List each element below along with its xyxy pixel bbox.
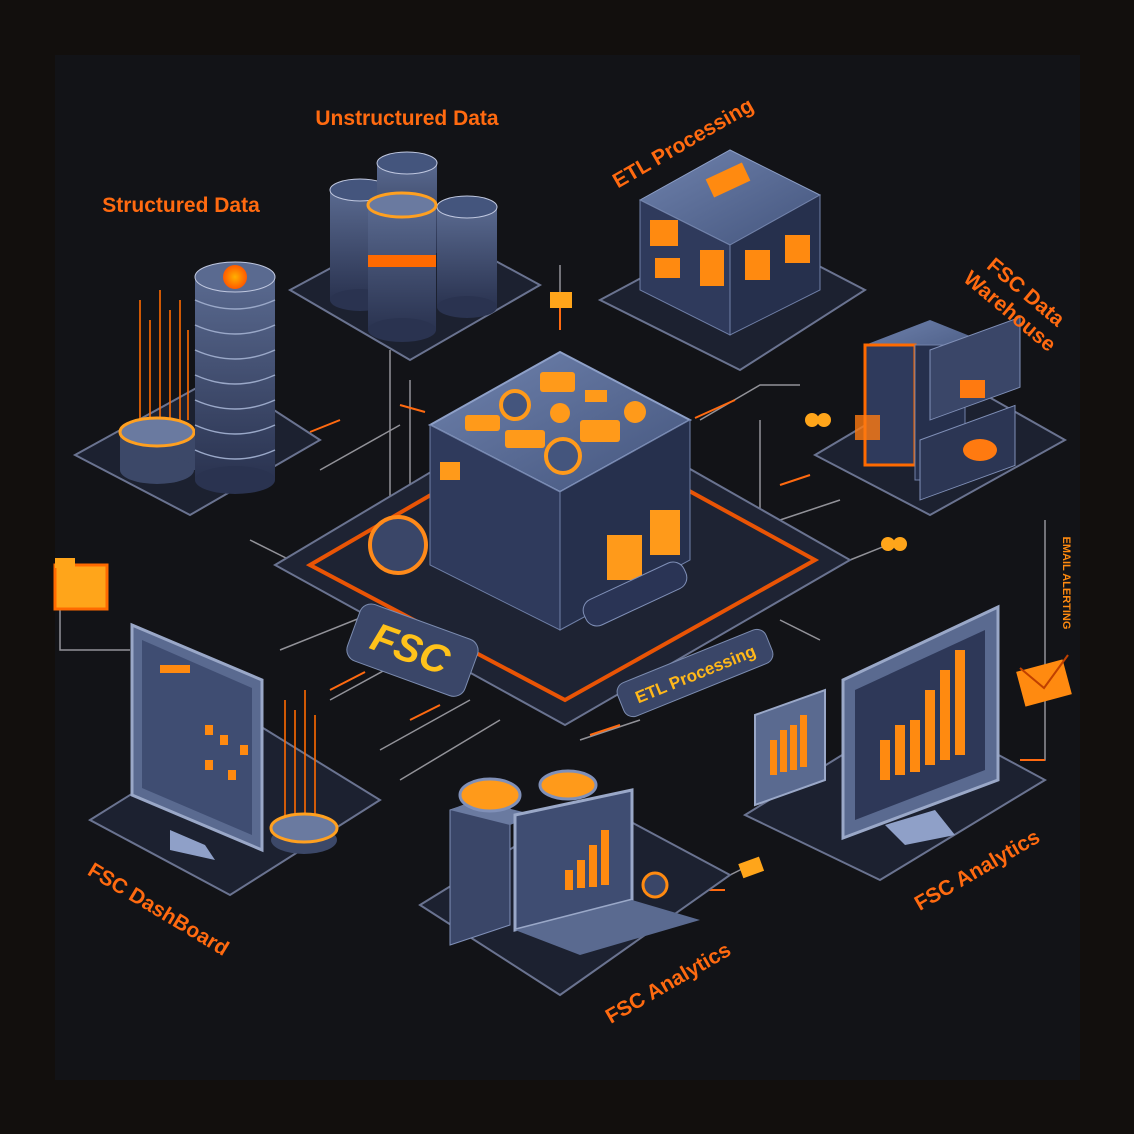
ETL Processing badge: ETL Processing bbox=[633, 642, 759, 707]
ETL Processing badge bbox=[614, 626, 776, 720]
label: unstructured data: Unstructured Data bbox=[315, 107, 499, 130]
icon: folder bbox=[55, 558, 107, 609]
label: FSC dashboard: FSC DashBoard bbox=[84, 859, 233, 961]
icon: small folder bbox=[550, 292, 572, 308]
connector lines bbox=[60, 265, 1045, 890]
icons: hearts bbox=[805, 413, 907, 551]
panel: FSC analytics center bbox=[420, 771, 764, 995]
panel: structured data bbox=[75, 262, 320, 515]
panel: FSC data warehouse bbox=[815, 317, 1065, 515]
FSC badge bbox=[343, 601, 481, 700]
icon: email envelope bbox=[1016, 655, 1072, 707]
panel: ETL processing cube bbox=[600, 150, 865, 370]
label: structured data: Structured Data bbox=[102, 194, 260, 217]
label: FSC analytics right: FSC Analytics bbox=[911, 825, 1044, 916]
panel: unstructured data bbox=[290, 107, 540, 360]
panel: FSC analytics right bbox=[745, 607, 1045, 880]
FSC badge: FSC bbox=[365, 615, 456, 684]
label: FSC data warehouse: FSC Data bbox=[982, 254, 1069, 331]
label: FSC analytics center: FSC Analytics bbox=[602, 938, 735, 1029]
panel: FSC dashboard bbox=[90, 625, 380, 895]
label: email alerting: EMAIL ALERTING bbox=[1060, 537, 1072, 629]
label: FSC data warehouse: Warehouse bbox=[959, 267, 1060, 356]
central building bbox=[430, 352, 691, 630]
label: ETL processing: ETL Processing bbox=[609, 94, 758, 193]
panel: central FSC platform bbox=[275, 352, 850, 725]
